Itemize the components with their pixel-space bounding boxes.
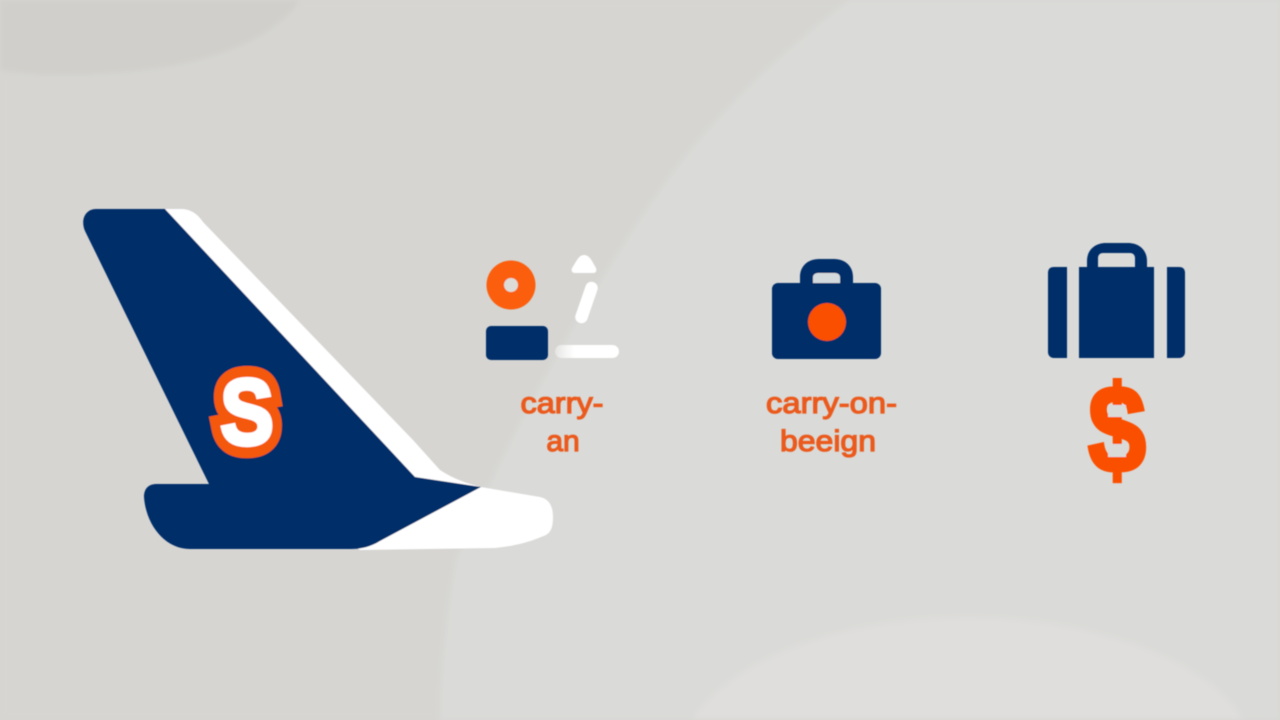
icon: orange disc — [486, 260, 536, 310]
label: carry-an: carry- — [520, 387, 604, 420]
icon: white slash — [582, 288, 592, 317]
icon: dollar sign: $ — [1088, 361, 1146, 499]
label: carry-on-beeign: beeign — [780, 425, 876, 458]
icon: briefcase — [772, 259, 881, 359]
label: carry-an: an — [546, 425, 580, 458]
icon: suitcase — [1048, 243, 1185, 358]
tail logo letter S: S — [220, 362, 274, 464]
column 1: carry-on items — [486, 255, 619, 458]
tail navy fin — [83, 209, 481, 549]
column 3: checked bag fee — [1048, 243, 1185, 499]
icon: white bar — [555, 345, 619, 358]
label: carry-on-beeign: carry-on- — [766, 387, 897, 420]
icon: navy block — [486, 326, 548, 360]
icon: white triangle — [572, 255, 596, 273]
tail logo letter S: S — [220, 362, 274, 464]
column 2: carry-on bag — [766, 259, 897, 458]
airplane tail — [83, 209, 553, 550]
tail white trim — [165, 209, 553, 550]
